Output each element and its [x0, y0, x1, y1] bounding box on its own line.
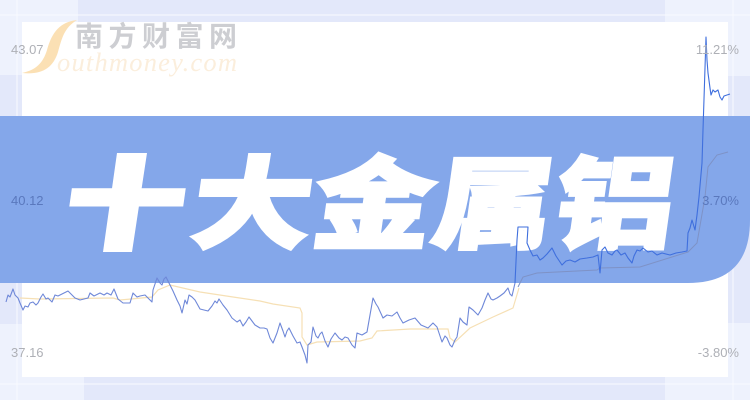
- watermark: southmoney logo: outhmoney.com: [57, 47, 238, 77]
- watermark: southmoney logo: [22, 15, 243, 77]
- banner: blue title band: [0, 116, 750, 283]
- axis label: right bottom: -3.80%: [698, 345, 739, 360]
- title: 十大金属铝: [57, 124, 687, 269]
- title: 十大金属铝: 大: [184, 124, 324, 269]
- chart: price line over band: [515, 37, 730, 283]
- watermark: southmoney logo: 南方财富网: [75, 15, 243, 55]
- title: 十大金属铝: 属: [425, 124, 565, 269]
- title: 十大金属铝: 铝: [547, 124, 687, 269]
- chart: price line: [6, 277, 515, 363]
- title: 十大金属铝: 金: [305, 124, 445, 269]
- axis label: right top: 11.21%: [696, 42, 739, 57]
- axis label: left bottom: 37.16: [11, 345, 44, 360]
- axis label: left middle: 40.12: [11, 193, 44, 208]
- axis label: right middle: 3.70%: [702, 193, 739, 208]
- axis label: left top: 43.07: [11, 42, 44, 57]
- title: 十大金属铝: 十: [57, 124, 197, 269]
- chart: moving average line on white: [20, 285, 519, 345]
- chart: moving average line on band: [518, 152, 728, 287]
